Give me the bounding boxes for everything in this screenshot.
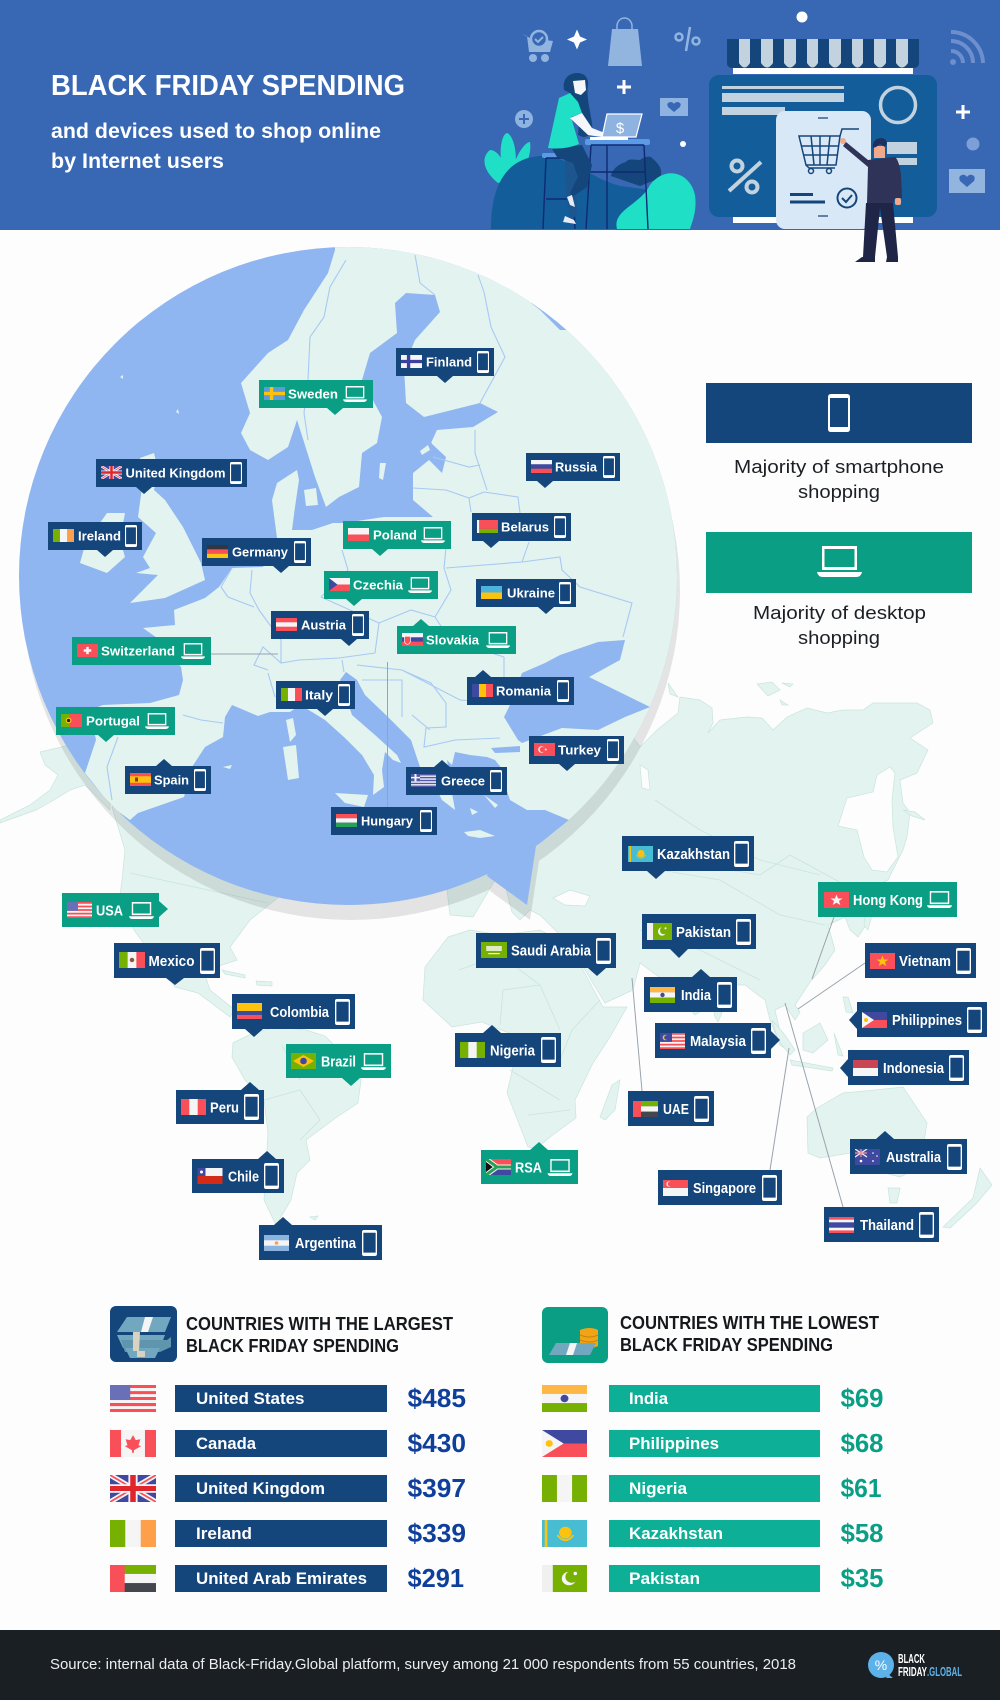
subtitle: by Internet users bbox=[51, 149, 224, 173]
label: Belarus: Belarus bbox=[501, 520, 549, 534]
label: Spain bbox=[125, 759, 211, 794]
row: Philippines: Philippines bbox=[629, 1434, 719, 1453]
label: Ukraine: Ukraine bbox=[507, 586, 555, 600]
label: United Kingdom: United Kingdom bbox=[126, 466, 226, 480]
subtitle: and devices used to shop online bbox=[51, 119, 381, 143]
label: Germany: Germany bbox=[232, 544, 289, 560]
label: Australia bbox=[850, 1131, 967, 1174]
label: Pakistan bbox=[642, 914, 756, 958]
label: Peru: Peru bbox=[210, 1100, 239, 1116]
label: Slovakia: Slovakia bbox=[426, 632, 480, 648]
icon: floating shopping icons bbox=[515, 12, 808, 147]
label: Indonesia: Indonesia bbox=[883, 1061, 945, 1077]
illustration: woman on a stool with laptop bbox=[542, 73, 650, 229]
label: Singapore bbox=[658, 1170, 782, 1205]
label: RSA: RSA bbox=[515, 1160, 542, 1176]
panel: world map bbox=[0, 230, 992, 1260]
label: UAE bbox=[628, 1091, 714, 1126]
label: Brazil: Brazil bbox=[321, 1054, 356, 1070]
row: Nigeria bbox=[542, 1473, 882, 1503]
label: Italy bbox=[276, 681, 355, 716]
label: Ireland: Ireland bbox=[78, 528, 121, 544]
label: Italy: Italy bbox=[305, 688, 334, 702]
magnified Europe circle bbox=[19, 247, 677, 905]
connector: Hong Kong bbox=[812, 917, 834, 979]
row: United Arab Emirates bbox=[110, 1563, 464, 1593]
row: Pakistan bbox=[542, 1563, 884, 1593]
connector: Hungary bbox=[386, 662, 388, 807]
label: Hungary bbox=[331, 807, 437, 835]
row: Canada bbox=[110, 1428, 466, 1458]
legend: desktop: Majority of desktop bbox=[753, 602, 926, 623]
label: Singapore: Singapore bbox=[693, 1181, 756, 1197]
label: Poland: Poland bbox=[373, 528, 417, 542]
label: Vietnam bbox=[865, 943, 976, 978]
label: Hong Kong bbox=[818, 882, 957, 917]
label: UAE: UAE bbox=[663, 1102, 689, 1118]
label: Chile bbox=[192, 1151, 284, 1193]
panel: footer bbox=[0, 1630, 1000, 1700]
label: Thailand: Thailand bbox=[860, 1218, 914, 1234]
panel: lowest spending bbox=[542, 1307, 884, 1593]
panel: largest spending bbox=[110, 1306, 466, 1593]
label: Peru bbox=[176, 1082, 264, 1124]
connector: UAE bbox=[632, 978, 642, 1091]
row: Ireland: Ireland bbox=[196, 1524, 252, 1543]
row: Pakistan: Pakistan bbox=[629, 1569, 700, 1588]
sea patches bbox=[431, 303, 650, 753]
row: United States bbox=[110, 1383, 466, 1413]
label: Finland bbox=[396, 348, 494, 383]
connector: Thailand bbox=[785, 1003, 843, 1207]
row: India: $69 bbox=[840, 1383, 884, 1413]
label: Malaysia bbox=[655, 1023, 780, 1058]
label: Romania: Romania bbox=[496, 684, 552, 698]
row: Canada: $430 bbox=[408, 1428, 466, 1458]
heading: largest bbox=[186, 1314, 453, 1356]
label: Mexico: Mexico bbox=[148, 954, 195, 970]
label: Romania bbox=[467, 670, 574, 705]
row: United Kingdom: $397 bbox=[408, 1473, 466, 1503]
legend: desktop: shopping bbox=[798, 627, 880, 648]
row: United Arab Emirates: United Arab Emirates bbox=[196, 1569, 367, 1588]
icon: wifi signal bbox=[950, 32, 983, 65]
label: Poland bbox=[343, 521, 451, 556]
label: Argentina: Argentina bbox=[295, 1236, 357, 1252]
row: United States: United States bbox=[196, 1389, 304, 1408]
row: Ireland: $339 bbox=[408, 1518, 466, 1548]
label: Thailand bbox=[824, 1207, 939, 1242]
icons: right side decorations bbox=[949, 105, 985, 193]
label: Turkey: Turkey bbox=[558, 742, 602, 758]
row: Philippines: $68 bbox=[840, 1428, 884, 1458]
label: Chile: Chile bbox=[228, 1170, 259, 1186]
label: Turkey bbox=[529, 736, 624, 771]
row: India: India bbox=[629, 1389, 669, 1408]
label: Philippines bbox=[849, 1002, 987, 1037]
label: Malaysia: Malaysia bbox=[690, 1034, 747, 1050]
logo bbox=[868, 1651, 962, 1679]
label: Russia bbox=[526, 453, 620, 488]
row: Pakistan: $35 bbox=[840, 1563, 884, 1593]
row: United States: $485 bbox=[408, 1383, 466, 1413]
row: United Arab Emirates: $291 bbox=[408, 1563, 464, 1593]
label: Czechia: Czechia bbox=[353, 578, 404, 592]
row: Canada: Canada bbox=[196, 1434, 257, 1453]
connector: Vietnam bbox=[798, 963, 865, 1009]
label: Austria bbox=[271, 611, 369, 646]
label: Colombia bbox=[232, 994, 355, 1037]
logo: BLACK bbox=[898, 1651, 925, 1666]
label: Slovakia bbox=[397, 619, 516, 654]
heading: lowest bbox=[620, 1313, 879, 1355]
heading: lowest: BLACK FRIDAY SPENDING bbox=[620, 1335, 833, 1355]
label: Russia: Russia bbox=[555, 460, 598, 474]
row: Kazakhstan: Kazakhstan bbox=[629, 1524, 723, 1543]
label: Switzerland bbox=[72, 637, 211, 665]
label: Portugal: Portugal bbox=[86, 714, 140, 728]
awning bbox=[727, 39, 919, 68]
label: Ireland bbox=[48, 522, 142, 557]
row: Kazakhstan: $58 bbox=[840, 1518, 884, 1548]
label: United Kingdom bbox=[96, 459, 247, 494]
icon: banknotes and coins bbox=[542, 1307, 608, 1363]
label: India: India bbox=[681, 988, 712, 1004]
land: mainland Europe bbox=[85, 235, 720, 850]
row: Ireland bbox=[110, 1518, 466, 1548]
country borders bbox=[107, 255, 632, 800]
label: Argentina bbox=[259, 1217, 382, 1260]
panel: legend bbox=[706, 383, 972, 648]
logo: % bbox=[875, 1657, 887, 1673]
label: Switzerland: Switzerland bbox=[101, 644, 175, 658]
label: Nigeria: Nigeria bbox=[490, 1044, 536, 1060]
label: Hong Kong: Hong Kong bbox=[853, 893, 923, 909]
connector: Switzerland bbox=[211, 653, 278, 655]
illustration: woman on a stool with laptop: $ bbox=[616, 120, 625, 137]
label: Saudi Arabia bbox=[476, 933, 616, 976]
world land outside the circle bbox=[0, 682, 992, 1228]
legend: smartphone: shopping bbox=[798, 481, 880, 502]
icon: stack of banknotes bbox=[110, 1306, 177, 1362]
row: Nigeria: $61 bbox=[840, 1473, 882, 1503]
magnifier drop shadow bbox=[22, 262, 680, 920]
panel: header banner bbox=[0, 0, 1000, 262]
logo: FRIDAY bbox=[898, 1664, 927, 1679]
connector: Singapore bbox=[770, 1048, 789, 1170]
label: USA: USA bbox=[96, 904, 123, 920]
label: Hungary: Hungary bbox=[361, 814, 414, 828]
label: Spain: Spain bbox=[154, 772, 189, 788]
heading: lowest: COUNTRIES WITH THE LOWEST bbox=[620, 1313, 879, 1333]
label: Vietnam: Vietnam bbox=[899, 954, 951, 970]
label: Finland: Finland bbox=[426, 354, 472, 370]
row: Philippines bbox=[542, 1428, 884, 1458]
label: Czechia bbox=[324, 571, 438, 606]
label: RSA bbox=[481, 1142, 578, 1184]
row: United Kingdom: United Kingdom bbox=[196, 1479, 325, 1498]
heading: largest: BLACK FRIDAY SPENDING bbox=[186, 1336, 399, 1356]
row: Nigeria: Nigeria bbox=[629, 1479, 688, 1498]
logo: .GLOBAL bbox=[927, 1664, 962, 1679]
label: Indonesia bbox=[840, 1050, 969, 1085]
legend: smartphone: Majority of smartphone bbox=[734, 456, 944, 477]
label: Colombia: Colombia bbox=[270, 1005, 330, 1021]
label: Philippines: Philippines bbox=[892, 1013, 962, 1029]
label: Austria: Austria bbox=[301, 618, 347, 632]
title: BLACK FRIDAY SPENDING bbox=[51, 70, 405, 102]
label: Nigeria bbox=[455, 1025, 561, 1067]
label: Saudi Arabia: Saudi Arabia bbox=[511, 944, 592, 960]
label: Sweden bbox=[259, 380, 373, 415]
label: Germany bbox=[202, 538, 311, 573]
label: Ukraine bbox=[476, 579, 576, 614]
subtitle bbox=[51, 119, 381, 173]
label: Greece: Greece bbox=[441, 774, 485, 788]
label: Sweden: Sweden bbox=[288, 386, 338, 402]
row: Kazakhstan bbox=[542, 1518, 884, 1548]
illustration: online store window bbox=[709, 39, 937, 223]
legend: desktop bbox=[706, 532, 972, 648]
illustration: phone with cart bbox=[776, 111, 871, 229]
source note: Source: internal data of Black-Friday.Global platform, survey among 21 000 respondents from 55 countries, 2018 bbox=[50, 1656, 796, 1673]
label: Portugal bbox=[56, 707, 175, 742]
label: Brazil bbox=[286, 1044, 391, 1086]
label: USA bbox=[62, 893, 168, 927]
label: Belarus bbox=[472, 513, 571, 548]
label: Greece bbox=[406, 760, 507, 795]
label: Australia: Australia bbox=[886, 1150, 942, 1166]
label: India bbox=[644, 969, 737, 1012]
row: United Kingdom bbox=[110, 1473, 466, 1503]
label: Mexico bbox=[114, 943, 220, 985]
label: Kazakhstan bbox=[622, 836, 754, 879]
legend: smartphone bbox=[706, 383, 972, 502]
land: islands bbox=[80, 375, 498, 838]
heading: largest: COUNTRIES WITH THE LARGEST bbox=[186, 1314, 453, 1334]
label: Kazakhstan: Kazakhstan bbox=[657, 847, 730, 863]
label: Pakistan: Pakistan bbox=[676, 925, 731, 941]
illustration: hill and plants bbox=[484, 133, 696, 229]
row: India bbox=[542, 1383, 884, 1413]
illustration: man pointing at the cart bbox=[840, 138, 902, 262]
